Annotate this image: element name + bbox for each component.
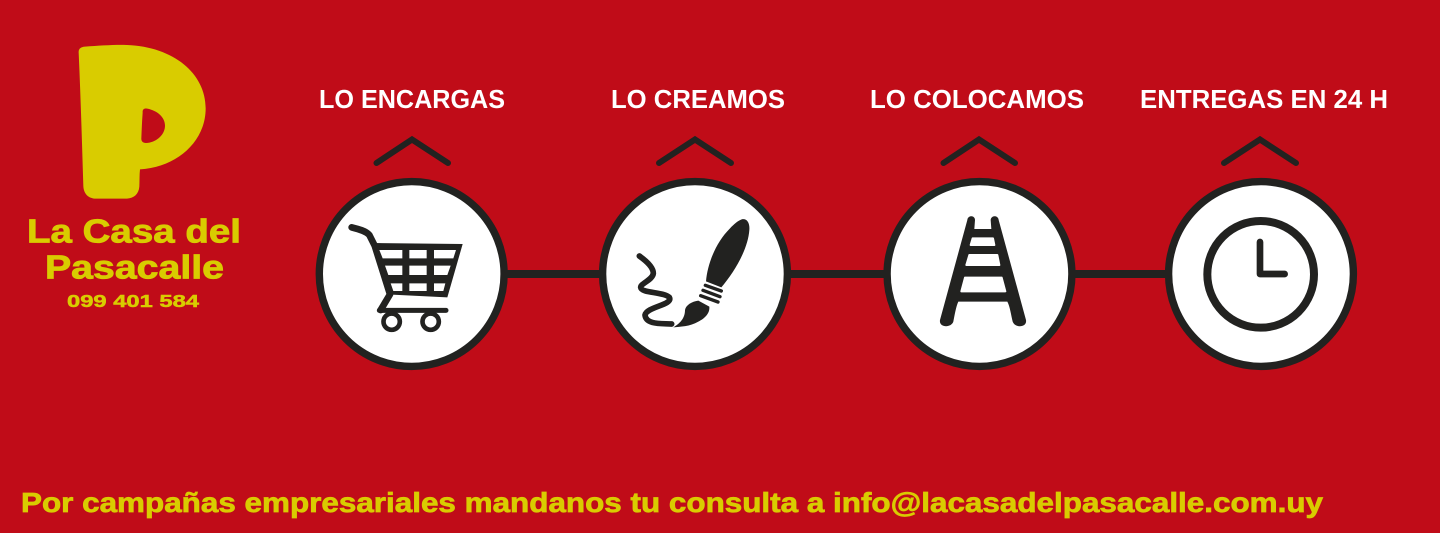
heading: LO COLOCAMOS	[870, 84, 1084, 114]
step 2: lo creamos	[603, 84, 787, 366]
step 4: entregas en 24 h	[1140, 84, 1388, 366]
chevron	[1224, 140, 1296, 163]
icon: paint brush	[639, 219, 749, 327]
connector lines	[500, 270, 1172, 278]
circle	[319, 182, 504, 366]
phone number: 099 401 584	[67, 291, 199, 311]
heading: ENTREGAS EN 24 H	[1140, 84, 1388, 114]
brand name line 1: La Casa del	[27, 212, 241, 250]
chevron	[944, 140, 1015, 163]
heading: LO CREAMOS	[611, 84, 785, 114]
icon: clock	[1207, 221, 1314, 328]
icon: shopping cart	[352, 227, 463, 330]
step 3: lo colocamos	[870, 84, 1084, 366]
footer contact line: Por campañas empresariales mandanos tu consulta a info@lacasadelpasacalle.com.uy	[21, 487, 1324, 518]
circle	[887, 182, 1072, 366]
step 1: lo encargas	[319, 84, 505, 366]
chevron	[659, 140, 731, 163]
logo block	[27, 45, 241, 311]
chevron	[376, 140, 448, 163]
heading: LO ENCARGAS	[319, 84, 505, 114]
circle	[1169, 182, 1353, 366]
icon: ladder	[940, 216, 1026, 326]
circle	[603, 182, 787, 366]
logo letter P	[79, 45, 206, 199]
brand name line 2: Pasacalle	[45, 248, 224, 286]
